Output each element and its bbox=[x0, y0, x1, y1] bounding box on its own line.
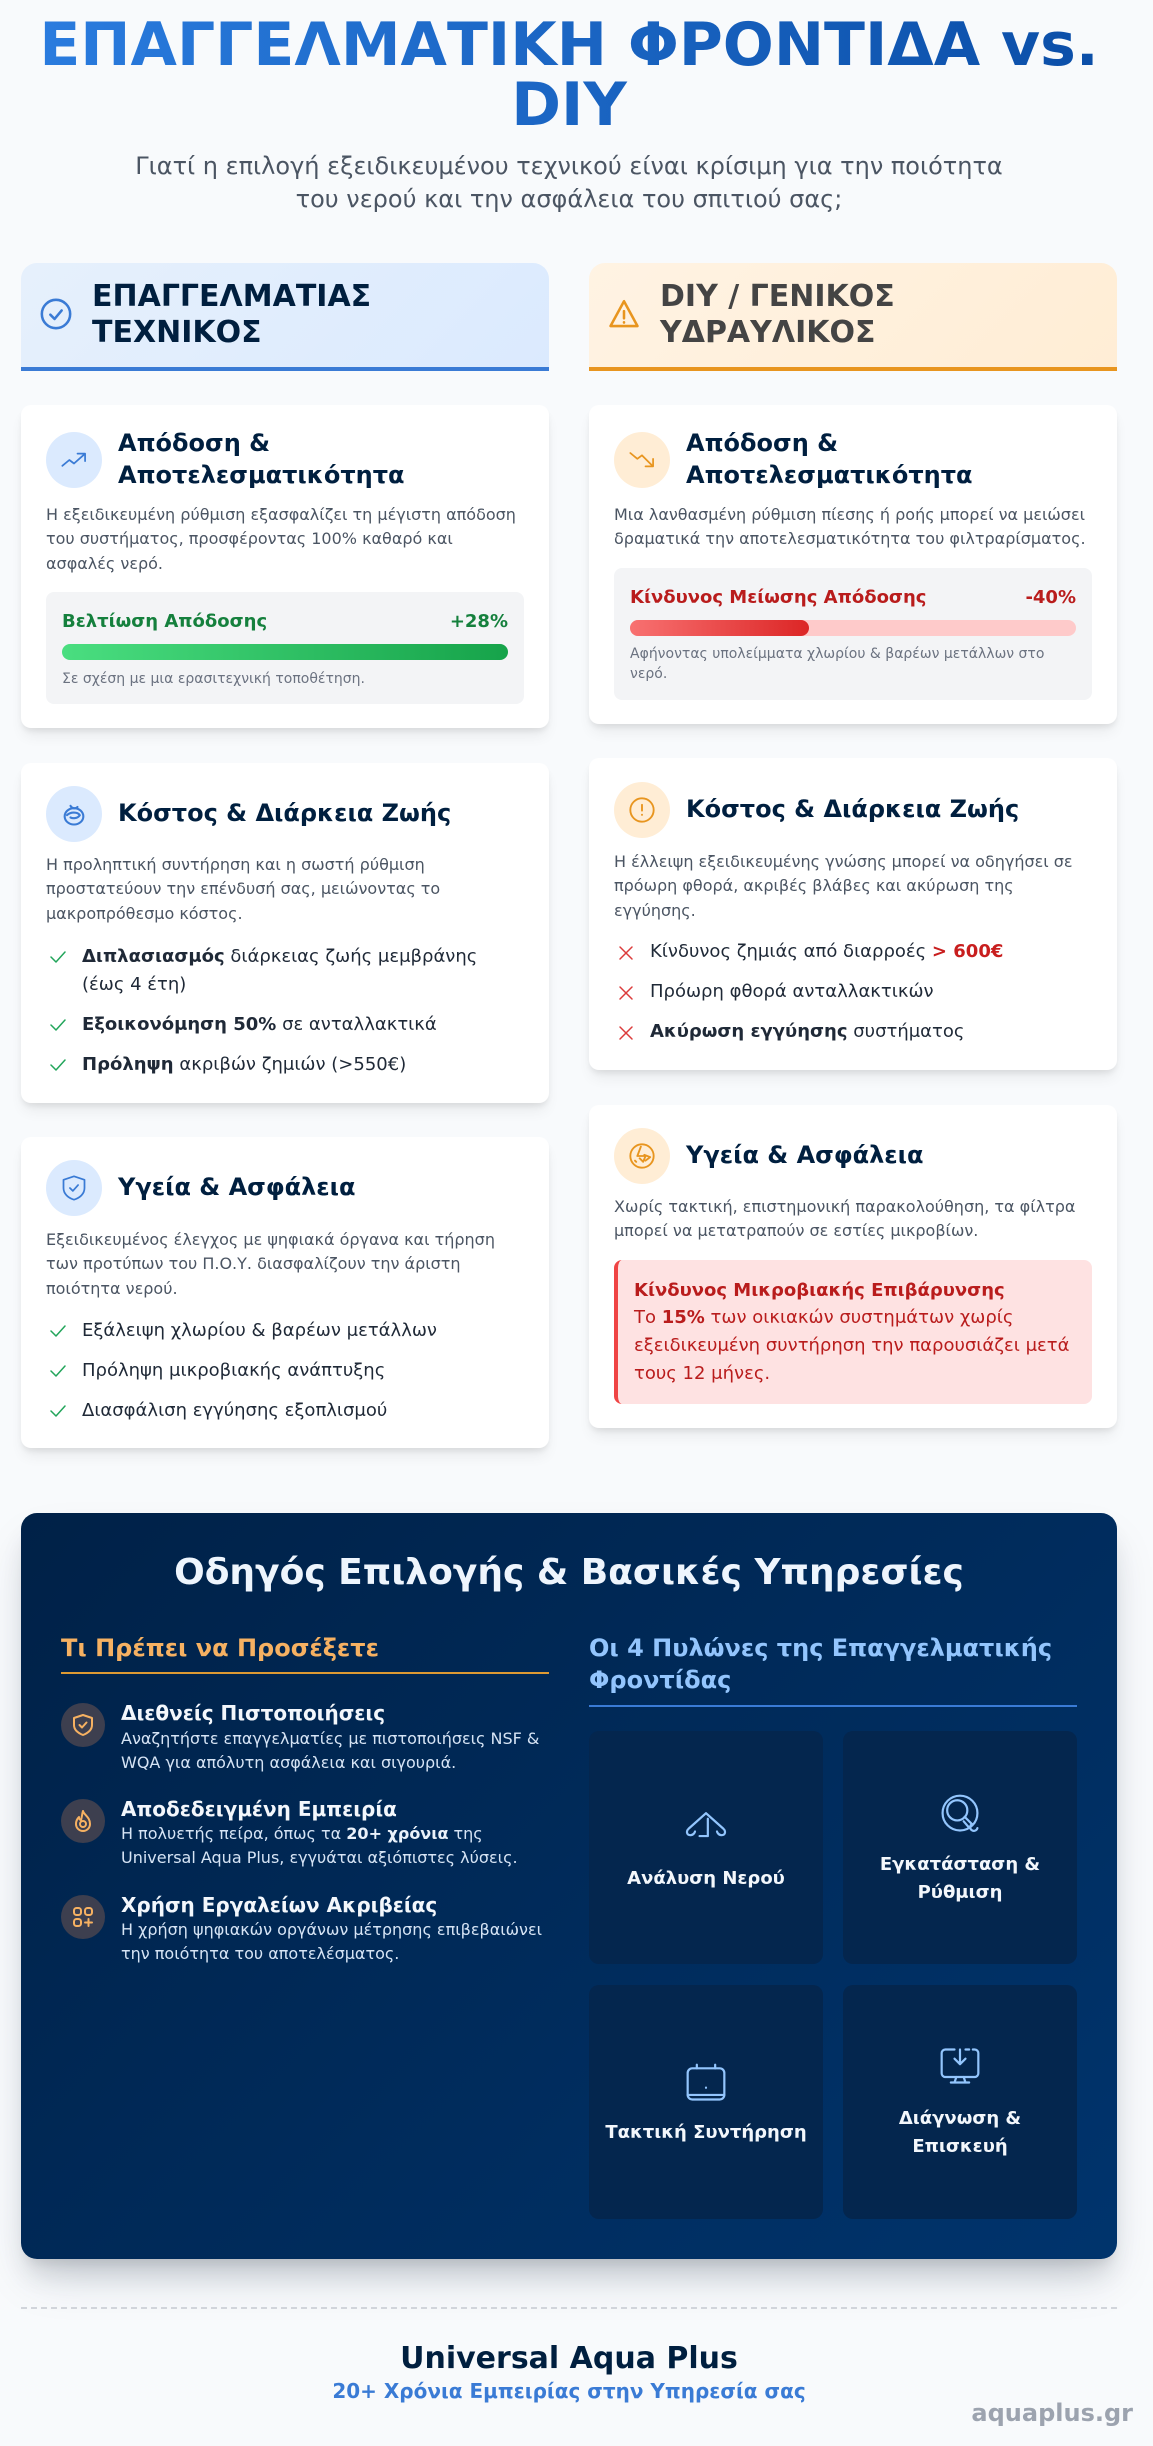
check icon bbox=[50, 1059, 66, 1071]
icon: precision tools bbox=[61, 1895, 105, 1939]
icon: trend down bbox=[614, 432, 670, 488]
list item: Πρόληψη μικροβιακής ανάπτυξης bbox=[82, 1360, 385, 1381]
callout text: εξειδικευμένη συντήρηση την παρουσιάζει μετά bbox=[634, 1335, 1069, 1356]
column header: professional bbox=[21, 263, 549, 371]
panel: selection guide bbox=[21, 1513, 1117, 2259]
item text: την ποιότητα του αποτελέσματος. bbox=[121, 1944, 399, 1963]
subheading: what to look for: Τι Πρέπει να Προσέξετε bbox=[61, 1634, 379, 1662]
tile: water analysis bbox=[589, 1731, 823, 1964]
icon: installation magnifier bbox=[942, 1794, 978, 1832]
heading bbox=[118, 429, 405, 489]
list item: Εξοικονόμηση 50% σε ανταλλακτικά bbox=[82, 1014, 437, 1035]
item text: Η πολυετής πείρα, όπως τα 20+ χρόνια της bbox=[121, 1824, 483, 1843]
icon: monitor bbox=[940, 2048, 980, 2084]
stat: performance gain bbox=[46, 592, 524, 704]
heading: Απόδοση & bbox=[118, 429, 270, 457]
body text: ποιότητα νερού. bbox=[46, 1279, 178, 1298]
item title: Αποδεδειγμένη Εμπειρία bbox=[121, 1797, 397, 1821]
heading: Κόστος & Διάρκεια Ζωής bbox=[686, 795, 1019, 823]
cross icon bbox=[619, 986, 633, 1000]
progress bar fill bbox=[630, 620, 809, 636]
item text: WQA για απόλυτη ασφάλεια και σιγουριά. bbox=[121, 1753, 456, 1772]
tile: installation bbox=[843, 1731, 1077, 1964]
heading: Αποτελεσματικότητα bbox=[686, 461, 973, 489]
panel: DIY health bbox=[589, 1105, 1117, 1428]
title bbox=[0, 15, 1138, 135]
tile label bbox=[899, 2108, 1021, 2156]
stat value: -40% bbox=[1025, 587, 1076, 608]
icon: bacteria bbox=[614, 1128, 670, 1184]
callout text bbox=[634, 1307, 1069, 1384]
item text: Η χρήση ψηφιακών οργάνων μέτρησης επιβεβαιώνει bbox=[121, 1920, 542, 1939]
body text: Μια λανθασμένη ρύθμιση πίεσης ή ροής μπορεί να μειώσει bbox=[614, 505, 1085, 524]
body text: ασφαλές νερό. bbox=[46, 554, 163, 573]
body text: πρόωρη φθορά, ακριβές βλάβες και ακύρωση της bbox=[614, 876, 1014, 895]
body text: των προτύπων του Π.Ο.Υ. διασφαλίζουν την άριστη bbox=[46, 1254, 461, 1273]
icon: water analysis bbox=[686, 1812, 726, 1838]
body text: μπορεί να μετατραπούν σε εστίες μικροβίων. bbox=[614, 1221, 978, 1240]
tile label: Εγκατάσταση & bbox=[880, 1854, 1040, 1875]
heading: Αποτελεσματικότητα bbox=[118, 461, 405, 489]
list item: Διπλασιασμός διάρκειας ζωής μεμβράνης bbox=[82, 946, 477, 967]
icon: coin bbox=[46, 786, 102, 842]
footer tagline: 20+ Χρόνια Εμπειρίας στην Υπηρεσία σας bbox=[332, 2379, 806, 2403]
body text: εγγύησης. bbox=[614, 901, 696, 920]
body text: Η εξειδικευμένη ρύθμιση εξασφαλίζει τη μέγιστη απόδοση bbox=[46, 505, 516, 524]
body text: μακροπρόθεσμο κόστος. bbox=[46, 904, 243, 923]
list item: (έως 4 έτη) bbox=[82, 974, 186, 995]
icon: experience flame bbox=[61, 1799, 105, 1843]
panel: DIY cost bbox=[589, 758, 1117, 1070]
cross icon bbox=[619, 946, 633, 960]
item text bbox=[121, 1729, 539, 1772]
title: ΕΠΑΓΓΕΛΜΑΤΙΚΗ ΦΡΟΝΤΙΔΑ vs. bbox=[39, 10, 1099, 80]
check icon bbox=[50, 1405, 66, 1417]
title: DIY bbox=[511, 70, 627, 140]
subheading: four pillars: Φροντίδας bbox=[589, 1666, 731, 1694]
icon: alert circle bbox=[614, 782, 670, 838]
list item: Διασφάλιση εγγύησης εξοπλισμού bbox=[82, 1400, 387, 1421]
heading: DIY bbox=[660, 279, 895, 350]
footer brand: Universal Aqua Plus bbox=[400, 2341, 738, 2376]
panel: professional health bbox=[21, 1137, 549, 1448]
panel: DIY performance bbox=[589, 405, 1117, 724]
body text: δραματικά την αποτελεσματικότητα του φιλτραρίσματος. bbox=[614, 529, 1086, 548]
body text: Εξειδικευμένος έλεγχος με ψηφιακά όργανα και τήρηση bbox=[46, 1230, 495, 1249]
list item: Εξάλειψη χλωρίου & βαρέων μετάλλων bbox=[82, 1320, 437, 1341]
heading: professional: ΤΕΧΝΙΚΟΣ bbox=[92, 315, 262, 350]
panel: professional performance bbox=[21, 405, 549, 728]
tile label: Ρύθμιση bbox=[918, 1882, 1002, 1903]
item text: Αναζητήστε επαγγελματίες με πιστοποιήσεις NSF & bbox=[121, 1729, 539, 1748]
icon: trend up bbox=[46, 432, 102, 488]
callout: microbial risk bbox=[614, 1260, 1092, 1404]
body text: προστατεύουν την επένδυσή σας, μειώνοντας το bbox=[46, 879, 440, 898]
icon: warning triangle bbox=[609, 300, 639, 328]
check icon bbox=[50, 1325, 66, 1337]
footer divider bbox=[21, 2307, 1117, 2309]
list item: Πρόωρη φθορά ανταλλακτικών bbox=[650, 981, 934, 1002]
subtitle bbox=[135, 152, 1003, 213]
body text: Χωρίς τακτική, επιστημονική παρακολούθηση, τα φίλτρα bbox=[614, 1197, 1075, 1216]
icon: certification shield bbox=[61, 1703, 105, 1747]
subtitle: Γιατί η επιλογή εξειδικευμένου τεχνικού είναι κρίσιμη για την ποιότητα bbox=[135, 152, 1003, 180]
body text: Η έλλειψη εξειδικευμένης γνώσης μπορεί να οδηγήσει σε bbox=[614, 852, 1073, 871]
list item: Ακύρωση εγγύησης συστήματος bbox=[650, 1021, 964, 1042]
tile label: Τακτική Συντήρηση bbox=[605, 2122, 807, 2142]
stat note: Αφήνοντας υπολείμματα χλωρίου & βαρέων μετάλλων στο bbox=[630, 646, 1044, 662]
check icon bbox=[50, 951, 66, 963]
body text: του συστήματος, προσφέροντας 100% καθαρό και bbox=[46, 529, 453, 548]
item text bbox=[121, 1824, 518, 1867]
column header: DIY bbox=[589, 263, 1117, 371]
item title: Χρήση Εργαλείων Ακριβείας bbox=[121, 1893, 437, 1917]
guide heading: Οδηγός Επιλογής & Βασικές Υπηρεσίες bbox=[174, 1552, 964, 1593]
heading: DIY: ΥΔΡΑΥΛΙΚΟΣ bbox=[660, 315, 876, 350]
callout text: Το 15% των οικιακών συστημάτων χωρίς bbox=[634, 1307, 1013, 1328]
check icon bbox=[50, 1019, 66, 1031]
stat: performance loss bbox=[614, 568, 1092, 700]
progress bar bbox=[62, 644, 508, 660]
tile: maintenance bbox=[589, 1984, 823, 2218]
underline: what to look for bbox=[61, 1672, 549, 1674]
heading: Κόστος & Διάρκεια Ζωής bbox=[118, 799, 451, 827]
stat note: Σε σχέση με μια ερασιτεχνική τοποθέτηση. bbox=[62, 671, 365, 687]
list item bbox=[82, 946, 477, 995]
tile label bbox=[880, 1854, 1040, 1903]
icon: calendar bbox=[686, 2064, 726, 2101]
subheading: four pillars bbox=[589, 1634, 1052, 1694]
icon: check circle bbox=[40, 298, 72, 330]
body text bbox=[46, 505, 516, 573]
body text bbox=[614, 505, 1086, 548]
stat value: +28% bbox=[450, 611, 508, 632]
tile label: Διάγνωση & bbox=[899, 2108, 1021, 2128]
item text: Universal Aqua Plus, εγγυάται αξιόπιστες λύσεις. bbox=[121, 1848, 518, 1867]
callout heading: Κίνδυνος Μικροβιακής Επιβάρυνσης bbox=[634, 1280, 1005, 1301]
underline: four pillars bbox=[589, 1705, 1077, 1707]
panel: professional cost bbox=[21, 763, 549, 1103]
body text bbox=[46, 855, 440, 923]
cross icon bbox=[619, 1026, 633, 1040]
heading: DIY: DIY / ΓΕΝΙΚΟΣ bbox=[660, 279, 895, 314]
subtitle: του νερού και την ασφάλεια του σπιτιού σας; bbox=[296, 185, 842, 213]
stat label: Βελτίωση Απόδοσης bbox=[62, 611, 267, 632]
tile label: Επισκευή bbox=[912, 2136, 1008, 2156]
item text bbox=[121, 1920, 542, 1963]
heading: professional bbox=[92, 279, 371, 350]
stat note: νερό. bbox=[630, 666, 667, 682]
body text bbox=[614, 1197, 1075, 1240]
stat note bbox=[630, 646, 1044, 682]
tile label: Ανάλυση Νερού bbox=[627, 1868, 785, 1889]
item title: Διεθνείς Πιστοποιήσεις bbox=[121, 1701, 385, 1725]
heading: Υγεία & Ασφάλεια bbox=[686, 1141, 923, 1169]
heading: professional: ΕΠΑΓΓΕΛΜΑΤΙΑΣ bbox=[92, 279, 371, 314]
heading bbox=[686, 429, 973, 489]
check icon bbox=[50, 1365, 66, 1377]
heading: Απόδοση & bbox=[686, 429, 838, 457]
heading: Υγεία & Ασφάλεια bbox=[118, 1173, 355, 1201]
list item: Πρόληψη ακριβών ζημιών (>550€) bbox=[82, 1054, 406, 1075]
watermark: aquaplus.gr bbox=[971, 2399, 1133, 2427]
callout text: τους 12 μήνες. bbox=[634, 1363, 770, 1384]
progress bar track bbox=[630, 620, 1076, 636]
body text bbox=[46, 1230, 495, 1298]
body text bbox=[614, 852, 1073, 920]
tile: diagnosis bbox=[843, 1984, 1077, 2218]
subheading: four pillars: Οι 4 Πυλώνες της Επαγγελματικής bbox=[589, 1634, 1052, 1662]
stat label: Κίνδυνος Μείωσης Απόδοσης bbox=[630, 587, 926, 608]
list item: Κίνδυνος ζημιάς από διαρροές > 600€ bbox=[650, 941, 1003, 962]
icon: shield check bbox=[46, 1160, 102, 1216]
body text: Η προληπτική συντήρηση και η σωστή ρύθμιση bbox=[46, 855, 425, 874]
